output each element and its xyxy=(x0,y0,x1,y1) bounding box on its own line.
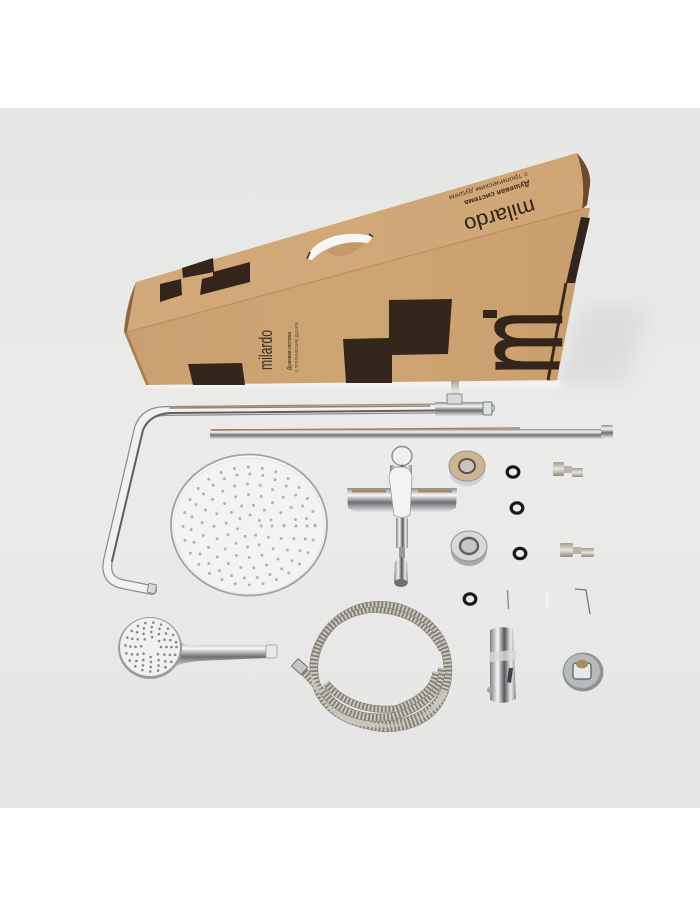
front logo text: milardo xyxy=(256,330,276,370)
flap product subtitle: с тропическим душем xyxy=(448,170,528,201)
nozzle rings xyxy=(183,467,315,585)
flap logo text: milardo xyxy=(461,194,538,236)
flap squares xyxy=(160,258,250,302)
logo dot xyxy=(483,310,497,318)
photo background xyxy=(0,108,700,808)
hose end nut xyxy=(291,659,308,675)
faucet spout xyxy=(396,518,408,548)
rail end cap xyxy=(601,425,613,438)
rubber o-rings xyxy=(464,467,526,604)
product photo scene xyxy=(0,108,700,808)
outlet elbow xyxy=(562,652,604,692)
slide rail xyxy=(210,425,613,439)
faucet lever xyxy=(389,467,412,518)
wall flange upper xyxy=(449,451,485,486)
hex key xyxy=(575,589,590,614)
box left fold xyxy=(124,332,149,385)
box front face xyxy=(127,209,583,385)
box side strip xyxy=(548,208,590,381)
front squares xyxy=(188,299,452,385)
front product title: Душевая система xyxy=(287,331,293,370)
hand shower nozzles xyxy=(126,622,176,672)
box left edge xyxy=(124,282,136,332)
hand shower handle xyxy=(172,640,268,668)
wall plug xyxy=(546,591,548,607)
bath mixer faucet xyxy=(347,446,457,587)
hand shower xyxy=(118,617,277,679)
flexible hose xyxy=(291,605,448,728)
shower arm xyxy=(107,380,492,594)
slide holder bracket xyxy=(487,627,516,703)
eccentric nipple lower xyxy=(560,543,594,557)
faucet cartridge cap xyxy=(392,446,412,466)
wall flange lower xyxy=(451,531,487,566)
hand shower face xyxy=(118,617,182,679)
arm diverter fitting xyxy=(435,380,492,416)
faucet crossbar xyxy=(347,488,457,512)
screw xyxy=(508,590,509,609)
front product subtitle: с тропическим душем xyxy=(294,322,300,372)
rain shower head xyxy=(171,454,327,596)
box inner edge xyxy=(577,153,590,209)
flap fold line xyxy=(127,209,583,332)
cardboard box xyxy=(124,153,650,387)
carry handle opening xyxy=(307,234,373,260)
box side dark stripe xyxy=(566,217,590,283)
box top flap xyxy=(127,153,590,332)
flap product title: Душевая система xyxy=(462,179,531,208)
eccentric nipple upper xyxy=(553,462,583,477)
arm end nut xyxy=(147,583,157,594)
large logo letter: m xyxy=(450,311,587,374)
